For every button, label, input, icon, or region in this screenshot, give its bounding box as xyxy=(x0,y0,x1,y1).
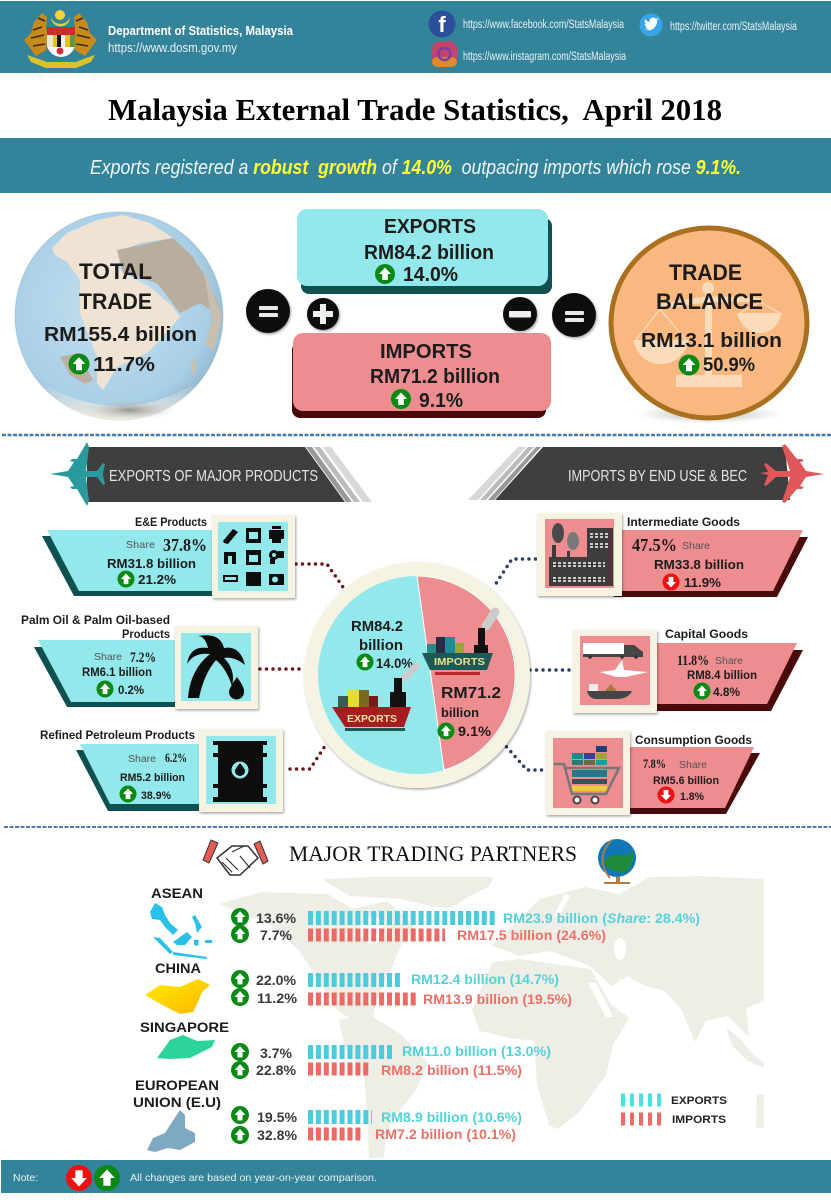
China label: CHINA xyxy=(155,961,201,976)
pie imports label xyxy=(438,685,501,740)
trade balance label xyxy=(641,260,782,376)
exports banner text: EXPORTS OF MAJOR PRODUCTS xyxy=(109,468,318,485)
EU import value: RM7.2 billion (10.1%) xyxy=(375,1127,516,1142)
banner: exports of major products xyxy=(50,442,372,506)
pie imports label: RM71.2 xyxy=(441,685,501,702)
trade balance circle xyxy=(611,228,807,424)
pie exports label: RM84.2 xyxy=(351,618,403,635)
exports box: RM84.2 billion xyxy=(364,242,494,264)
header website: https://www.dosm.gov.my xyxy=(108,40,237,55)
icon: imports ship: IMPORTS xyxy=(434,657,485,668)
trade balance label: RM13.1 billion xyxy=(641,330,782,352)
panel: capital goods: 4.8% xyxy=(713,687,740,699)
EU export bar xyxy=(308,1110,372,1124)
icon: Singapore map xyxy=(157,1035,215,1059)
icon: desk globe xyxy=(598,839,636,884)
panel: palm oil: Share xyxy=(94,651,122,663)
legend: EXPORTS xyxy=(671,1095,727,1107)
panel: refined petroleum: Refined Petroleum Products xyxy=(40,730,195,742)
Singapore export growth xyxy=(231,1043,292,1061)
imports box xyxy=(292,333,551,418)
panel: capital goods: Share xyxy=(715,655,743,667)
imports box: 9.1% xyxy=(419,390,463,412)
total trade label: TRADE xyxy=(79,289,152,314)
panel: intermediate goods xyxy=(537,513,808,597)
region: European Union xyxy=(133,1078,522,1152)
EU export growth xyxy=(231,1106,297,1125)
imports box: IMPORTS xyxy=(380,341,472,363)
instagram url: https://www.instagram.com/StatsMalaysia xyxy=(463,51,626,63)
panel: consumption goods: RM5.6 billion xyxy=(653,775,719,787)
region: ASEAN xyxy=(150,886,700,959)
ASEAN import bar xyxy=(308,928,445,942)
ASEAN import value: RM17.5 billion (24.6%) xyxy=(457,928,606,943)
trade balance label: BALANCE xyxy=(656,289,763,314)
ASEAN import growth xyxy=(231,925,292,943)
panel: refined petroleum xyxy=(40,729,283,812)
pie imports label: 9.1% xyxy=(458,724,491,739)
panel: palm oil: Palm Oil & Palm Oil-based xyxy=(21,615,170,627)
legend: IMPORTS xyxy=(672,1114,726,1126)
icon: shopping cart xyxy=(546,731,630,815)
total trade label: RM155.4 billion xyxy=(44,324,197,346)
imports banner text: IMPORTS BY END USE & BEC xyxy=(568,468,747,485)
panel: E&E products: Share xyxy=(126,539,155,551)
ASEAN export growth: 13.6% xyxy=(256,911,296,926)
panel: intermediate goods: Share xyxy=(682,540,710,552)
world map background xyxy=(222,877,763,1157)
panel: refined petroleum: RM5.2 billion xyxy=(120,772,185,784)
icon: handshake xyxy=(203,840,268,875)
China import bar xyxy=(308,992,416,1006)
globe land: africa xyxy=(117,238,222,317)
ASEAN export value: RM23.9 billion ( Share: 28.4%) xyxy=(503,911,700,926)
exports box: EXPORTS xyxy=(384,216,476,238)
twitter url: https://twitter.com/StatsMalaysia xyxy=(670,21,797,33)
pie exports label: billion xyxy=(359,637,403,654)
total trade label: 11.7% xyxy=(93,354,155,376)
globe land: north and south america xyxy=(52,215,180,390)
panel: E&E products: 21.2% xyxy=(138,572,176,587)
icon: teal plane xyxy=(50,442,105,506)
Singapore export value: RM11.0 billion (13.0%) xyxy=(402,1044,551,1059)
EU import bar xyxy=(308,1128,362,1140)
panel: E&E products: E&E Products xyxy=(135,517,207,529)
footer note text: All changes are based on year-on-year comparison. xyxy=(130,1172,377,1184)
panel: E&E products: 37.8% xyxy=(163,535,207,555)
imports box: RM71.2 billion xyxy=(370,366,500,388)
header department name: Department of Statistics, Malaysia xyxy=(108,23,294,38)
icon: red plane xyxy=(760,444,824,503)
ASEAN export bar xyxy=(308,911,496,925)
subtitle band xyxy=(0,138,831,193)
pie exports label xyxy=(351,618,413,671)
operator: plus xyxy=(307,298,339,330)
Singapore import growth: 22.8% xyxy=(256,1063,296,1078)
total trade label: TOTAL xyxy=(79,259,152,284)
panel: capital goods: RM8.4 billion xyxy=(687,670,757,682)
ASEAN label: ASEAN xyxy=(151,886,203,901)
banner: imports by end use xyxy=(468,444,824,503)
subtitle: Exports registered a robust growth of 14.0% outpacing imports which rose 9.1%. xyxy=(90,157,741,179)
exports box: 14.0% xyxy=(403,264,458,286)
icon: electronics grid xyxy=(212,515,295,598)
panel: E&E products: RM31.8 billion xyxy=(107,557,196,571)
legend xyxy=(621,1095,727,1126)
icon: up arrow legend xyxy=(94,1165,120,1191)
operator: equals right xyxy=(552,293,596,337)
panel: consumption goods: Consumption Goods xyxy=(635,735,752,747)
ASEAN import growth: 7.7% xyxy=(260,928,292,943)
globe land: far east xyxy=(203,267,222,350)
icon: twitter xyxy=(640,14,662,36)
Singapore export bar xyxy=(308,1045,393,1059)
region: Singapore xyxy=(140,1020,551,1079)
EU export value: RM8.9 billion (10.6%) xyxy=(381,1110,522,1125)
panel: consumption goods: Share xyxy=(679,759,707,771)
EU import growth: 32.8% xyxy=(257,1128,297,1143)
ASEAN export growth xyxy=(231,908,296,926)
facebook url: https://www.facebook.com/StatsMalaysia xyxy=(463,19,624,31)
EU export growth: 19.5% xyxy=(257,1110,297,1125)
trade balance label: 50.9% xyxy=(703,355,755,376)
icon: imports ship xyxy=(422,612,495,675)
China export value: RM12.4 billion (14.7%) xyxy=(411,972,559,987)
header band xyxy=(0,1,831,73)
China import growth xyxy=(231,988,297,1006)
pie exports label: 14.0% xyxy=(376,656,413,671)
panel: refined petroleum: 38.9% xyxy=(141,790,171,802)
China import growth: 11.2% xyxy=(257,991,297,1006)
icon: ASEAN map xyxy=(150,903,212,959)
icon: exports ship xyxy=(332,666,416,731)
pie chart: exports vs imports xyxy=(304,562,530,788)
icon: China map xyxy=(145,979,210,1014)
panel: consumption goods: 1.8% xyxy=(680,791,704,803)
icon: balance scale xyxy=(633,282,782,387)
panel: capital goods: 11.8% xyxy=(677,653,709,669)
icon: instagram xyxy=(432,41,457,67)
panel: palm oil: 7.2% xyxy=(130,650,156,666)
panel: palm oil: Products xyxy=(122,629,170,641)
panel: intermediate goods: Intermediate Goods xyxy=(627,517,740,529)
title: Malaysia External Trade Statistics, April 2018 xyxy=(108,92,722,127)
panel: palm oil: RM6.1 billion xyxy=(82,667,152,679)
Singapore import value: RM8.2 billion (11.5%) xyxy=(381,1063,522,1078)
panel: capital goods xyxy=(573,629,803,713)
panel: palm oil: 0.2% xyxy=(118,685,144,697)
EU label line 2: UNION (E.U) xyxy=(133,1095,221,1110)
EU import growth xyxy=(231,1126,297,1144)
panel: consumption goods: 7.8% xyxy=(643,756,666,771)
panel: intermediate goods: RM33.8 billion xyxy=(654,558,744,572)
operator: minus xyxy=(503,297,537,331)
panel: consumption goods xyxy=(546,731,760,815)
icon: EU map xyxy=(147,1110,195,1152)
China export bar xyxy=(308,973,402,987)
Singapore label: SINGAPORE xyxy=(140,1020,229,1035)
region: China xyxy=(145,961,572,1014)
icon: palm tree and oil drop xyxy=(175,626,258,709)
icon: truck plane ship xyxy=(573,630,657,713)
icon: coat of arms xyxy=(24,10,97,68)
pie imports label: billion xyxy=(441,705,479,720)
panel: intermediate goods: 11.9% xyxy=(684,575,721,590)
China import value: RM13.9 billion (19.5%) xyxy=(423,992,572,1007)
footer band xyxy=(1,1160,831,1193)
total trade label xyxy=(44,259,197,376)
icon: oil barrel xyxy=(199,729,283,812)
map inland seas xyxy=(360,893,643,1017)
icon: factory xyxy=(537,513,622,596)
panel: palm oil xyxy=(21,615,258,709)
operator: equals left xyxy=(246,289,290,333)
panel: capital goods: Capital Goods xyxy=(665,629,748,641)
China export growth xyxy=(231,970,296,988)
panel: refined petroleum: 6.2% xyxy=(165,750,187,765)
icon: exports ship: EXPORTS xyxy=(347,714,397,725)
icon: down arrow legend xyxy=(66,1165,92,1191)
panel: refined petroleum: Share xyxy=(128,753,156,765)
trade balance label: TRADE xyxy=(669,260,742,285)
section title: major trading partners: MAJOR TRADING PARTNERS xyxy=(289,841,577,866)
connector dots: exports xyxy=(260,564,345,769)
globe: total trade xyxy=(15,212,223,420)
panel: intermediate goods: 47.5% xyxy=(632,535,677,555)
connector dots: imports xyxy=(495,559,573,770)
exports box xyxy=(297,209,552,294)
Singapore import growth xyxy=(231,1061,296,1079)
China export growth: 22.0% xyxy=(256,973,296,988)
Singapore export growth: 3.7% xyxy=(260,1046,292,1061)
footer note label: Note: xyxy=(13,1172,38,1184)
icon: facebook: f xyxy=(438,12,446,37)
panel: E&E products xyxy=(42,515,295,598)
EU label: EUROPEAN xyxy=(135,1078,219,1093)
icon: facebook xyxy=(428,10,456,38)
Singapore import bar xyxy=(308,1062,371,1076)
